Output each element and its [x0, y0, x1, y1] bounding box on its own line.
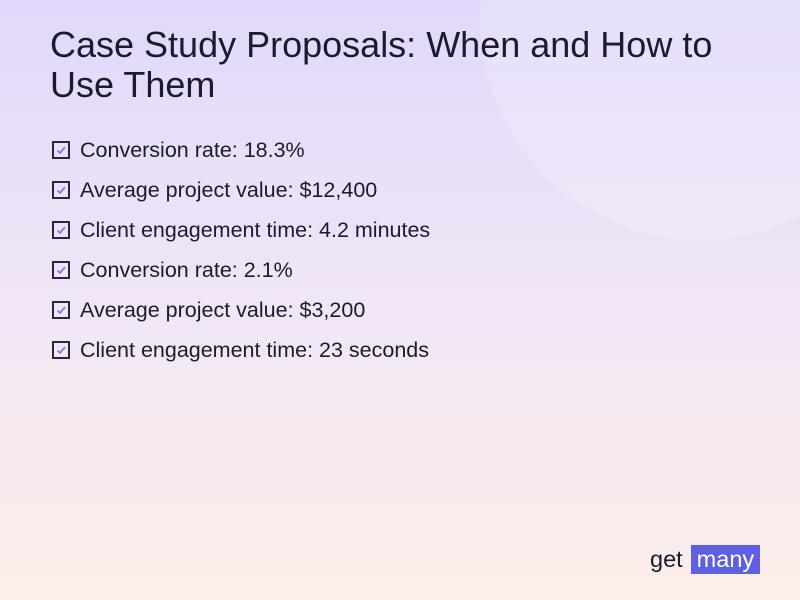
item: engagement time 2: Client engagement time: 23 seconds [80, 338, 429, 362]
logo [650, 545, 760, 574]
item: project value 2: Average project value: $3,200 [80, 298, 365, 322]
item: project value: Average project value: $12,400 [80, 178, 377, 202]
title: Case Study Proposals: When and How to Use Them [50, 24, 712, 105]
logo: get [650, 546, 683, 572]
checklist [52, 138, 430, 362]
item: engagement time: Client engagement time: 4.2 minutes [80, 218, 430, 242]
item: conversion rate: Conversion rate: 18.3% [80, 138, 305, 162]
logo: many [697, 546, 754, 572]
item: conversion rate 2: Conversion rate: 2.1% [80, 258, 293, 282]
